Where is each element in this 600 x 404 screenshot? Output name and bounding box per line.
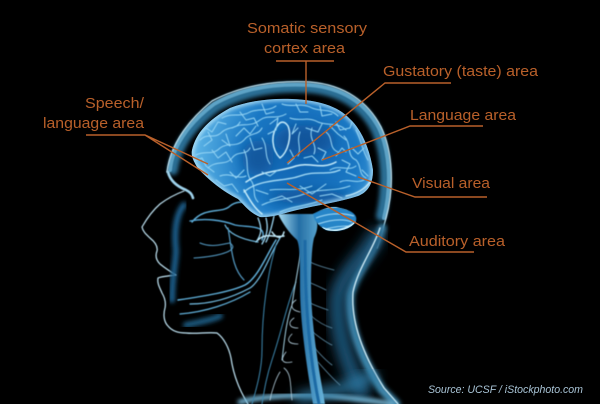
gyri (192, 104, 370, 214)
label: Somatic sensory cortex area: Somatic sensory (247, 21, 368, 37)
cheek shade (172, 205, 184, 300)
face profile (142, 191, 248, 404)
label: Speech/language area: language area (43, 116, 145, 132)
head silhouette (142, 82, 398, 404)
label: Language area: Language area (410, 108, 517, 124)
skull rim (167, 82, 391, 248)
label: Speech/language area: Speech/ (85, 96, 145, 112)
label: Gustatory (taste) area: Gustatory (taste) area (383, 64, 539, 80)
back of neck band (350, 228, 396, 404)
label: Speech/language area (43, 96, 208, 175)
skull band (173, 88, 385, 216)
label: Somatic sensory cortex area (247, 21, 368, 104)
nerves (178, 200, 340, 404)
neck base glow (240, 395, 392, 404)
cerebellum (312, 206, 356, 231)
label: Auditory area: Auditory area (409, 234, 506, 250)
label: Visual area (358, 176, 491, 197)
label: Visual area: Visual area (412, 176, 491, 192)
brow (168, 172, 193, 198)
source credit: Source: UCSF / iStockphoto.com (428, 384, 583, 396)
label: Auditory area (287, 183, 506, 252)
label: Gustatory (taste) area (287, 64, 539, 163)
spinal cord and brainstem (278, 214, 325, 404)
brain (192, 99, 373, 217)
label: Somatic sensory cortex area: cortex area (264, 41, 346, 57)
label: Language area (322, 108, 517, 160)
brain shading (242, 125, 352, 204)
brain edge highlight (192, 99, 373, 217)
